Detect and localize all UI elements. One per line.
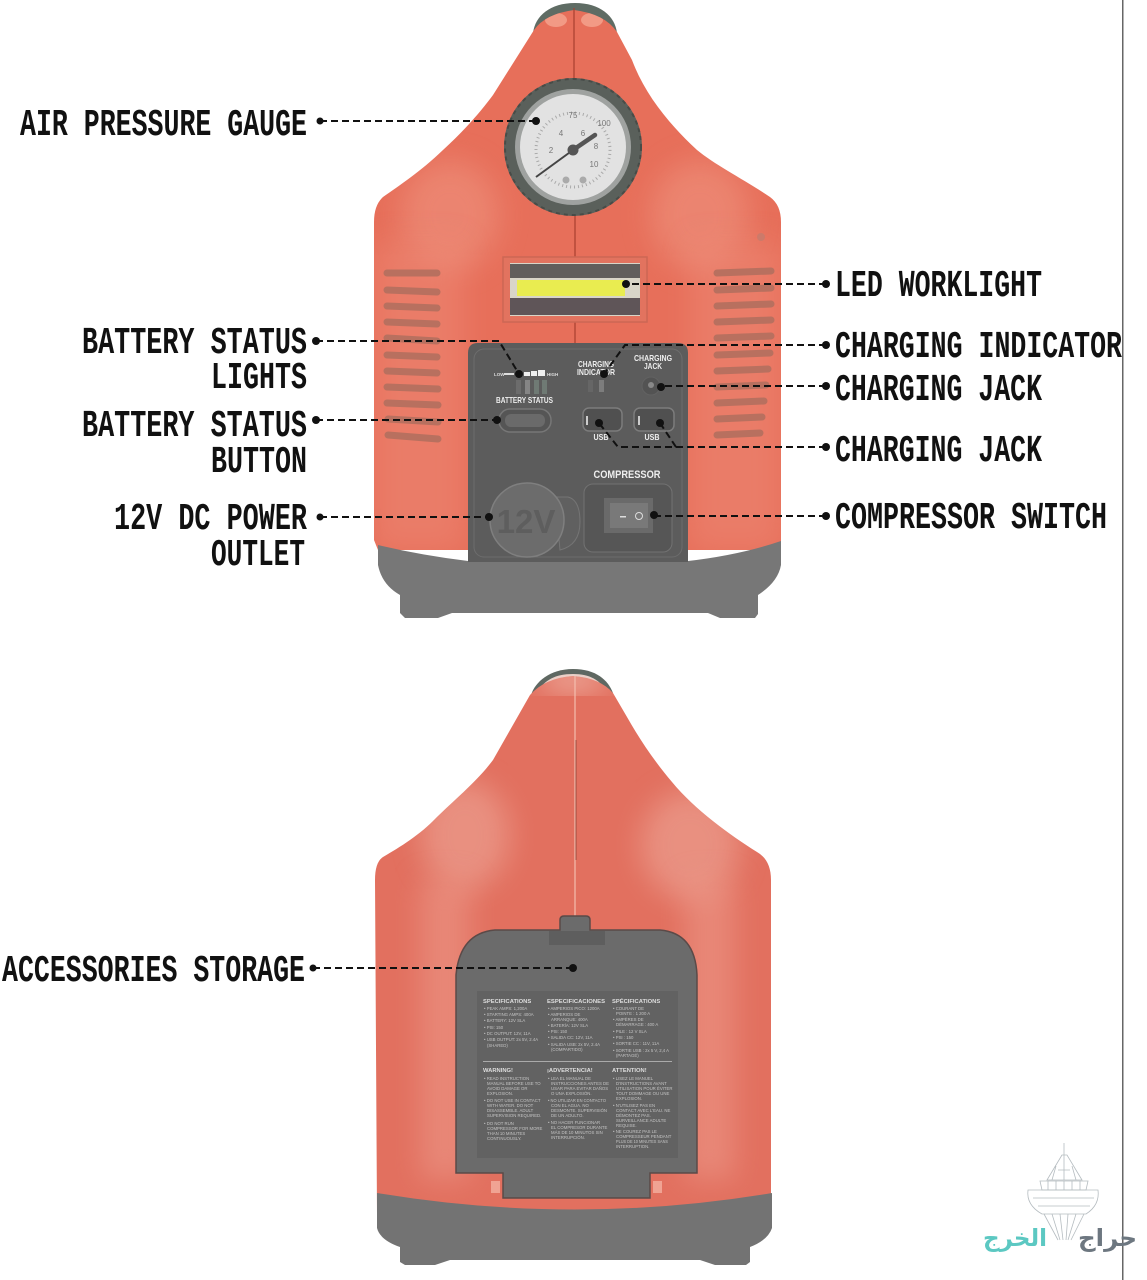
callout: air pressure gauge: AIR PRESSURE GAUGE [20,104,307,147]
USB ports: USB [594,433,609,442]
spécifications column: • PSI : 150 [613,1035,634,1040]
specifications column: CONTINUOUSLY. [487,1136,521,1141]
spécifications column: • COURANT DE [613,1006,644,1011]
especificaciones column: • NO UTILIZAR EN CONTACTO [548,1098,607,1103]
charging indicator: CHARGING [578,359,614,369]
specifications column: • USB OUTPUT: 2x 5V, 2.4A [484,1037,538,1042]
especificaciones column: CON EL AGUA. NO [551,1103,589,1108]
battery status lights: LOW [494,372,505,377]
spécifications column: TOUT DOMMAGE OU UNE [616,1091,669,1096]
red body [370,0,790,580]
spécifications column: • N'UTILISEZ PAS EN [613,1103,655,1108]
air pressure gauge: 75 [569,111,578,120]
compressor switch [584,469,672,552]
watermark logo [983,1143,1137,1252]
spécifications column: EXPLOSION. [616,1096,642,1101]
centre seam [574,8,575,344]
specifications column: AVOID DAMAGE OR [487,1086,528,1091]
callout: USB charging jacks [595,419,1042,473]
callout: USB charging jacks: CHARGING JACK [835,430,1042,473]
especificaciones column: • SALIDA CC: 12V, 11A [548,1035,593,1040]
callout: 12V DC power outlet: 12V DC POWER [114,498,307,541]
specifications column: DISASSEMBLE. ADULT [487,1108,534,1113]
gray base [378,541,781,618]
especificaciones column: EL COMPRESOR DURANTE [551,1125,608,1130]
especificaciones column: ESPECIFICACIONES [547,999,605,1005]
control panel [468,343,688,562]
especificaciones column: • NO HACER FUNCIONAR [548,1120,600,1125]
especificaciones column: ¡ADVERTENCIA! [547,1068,593,1074]
right vents [717,271,771,435]
especificaciones column: ARRANQUE: 400A [551,1017,588,1022]
especificaciones column: O UNA EXPLOSIÓN. [551,1091,592,1096]
page edge line [1122,0,1124,1280]
callout: compressor switch [650,497,1107,540]
especificaciones column: INTERRUPCIÓN. [551,1135,585,1140]
specifications column: • STARTING AMPS: 400A [484,1012,534,1017]
specifications column: EXPLOSION. [487,1091,513,1096]
spécifications column: (PARTAGÉ) [616,1053,639,1058]
callout: charging jack: CHARGING JACK [835,369,1042,412]
charging indicator [577,359,615,392]
callout: LED worklight: LED WORKLIGHT [835,265,1042,308]
specifications column: • DC OUTPUT: 12V, 11A [484,1031,531,1036]
spécifications column: SPÉCIFICATIONS [612,997,660,1005]
spécifications column: • LISEZ LE MANUEL [613,1076,654,1081]
especificaciones column: MÁS DE 10 MINUTOS SIN [551,1130,603,1135]
spécifications column: • NE COUREZ PAS LE [613,1129,657,1134]
specifications column: WARNING! [483,1068,513,1074]
especificaciones column: DE UN ADULTO. [551,1113,584,1118]
especificaciones column: • AMPERIOS DE [548,1012,580,1017]
spécifications column: • SORTIE USB : 2x 5 V, 2,4 A [613,1048,669,1053]
compressor switch: COMPRESSOR [594,469,661,481]
callout: battery status button [82,405,501,484]
especificaciones column [547,999,609,1140]
centre seam [574,676,576,916]
air pressure gauge: 100 [597,119,611,128]
air pressure gauge: 6 [581,129,586,138]
specifications column: • PSI: 150 [484,1025,504,1030]
specifications column: • DO NOT RUN [484,1121,514,1126]
air pressure gauge: 2 [549,146,554,155]
specifications column: (SHARED) [487,1043,508,1048]
charging jack: CHARGING [634,353,672,363]
spécifications column: • PILE : 12 V SLA [613,1029,647,1034]
callout: battery status button: BATTERY STATUS [82,405,307,448]
especificaciones column: DESMONTE. SUPERVISIÓN [551,1108,607,1113]
watermark text: Haraj: حراج [1078,1224,1137,1252]
specifications column: THAN 10 MINUTES [487,1131,525,1136]
spécifications column: POINTE : 1 200 A [616,1011,650,1016]
specifications column: COMPRESSOR FOR MORE [487,1126,543,1131]
specifications column: SPECIFICATIONS [483,999,531,1005]
especificaciones column: • PSI: 150 [548,1029,568,1034]
spécifications column: INTERRUPTION. [616,1144,649,1149]
device: rear view [370,669,780,1265]
USB ports: USB [644,433,660,442]
door hinge tabs [491,1181,662,1193]
12V power outlet cap: 12V [497,503,555,540]
battery status button [496,395,553,432]
device: front view [370,0,790,618]
callout: 12V DC power outlet: OUTLET [211,534,305,577]
specifications column: • DO NOT USE IN CONTACT [484,1098,541,1103]
spécifications column: COMPRESSEUR PENDANT [616,1134,672,1139]
spécifications column: • AMPÈRES DE [613,1017,644,1022]
accessories storage door [456,916,697,1198]
specifications column: • PEAK AMPS: 1,200A [484,1006,527,1011]
charging indicator: INDICATOR [577,367,615,377]
callout: battery status button: BUTTON [211,441,307,484]
spécifications column: REQUISE. [616,1123,637,1128]
battery status lights: HIGH [547,372,558,377]
especificaciones column: (COMPARTIDO) [551,1047,583,1052]
spécifications column: PLUS DE 10 MINUTES SANS [616,1139,668,1144]
specifications column: • BATTERY: 12V SLA [484,1018,525,1023]
especificaciones column: • SALIDA USB: 2x 5V, 2.4A [548,1042,600,1047]
especificaciones column: INSTRUCCIONES ANTES DE [551,1081,609,1086]
air pressure gauge [504,78,642,216]
top handle [533,3,617,33]
specifications column: WITH WATER. DO NOT [487,1103,534,1108]
air pressure gauge: 4 [559,129,564,138]
spécifications column: • SORTIE CC : 11V, 11A [613,1041,659,1046]
callout: charging indicator [600,326,1122,378]
12V power outlet cap [490,483,580,557]
callout: accessories storage: ACCESSORIES STORAGE [2,950,305,993]
specifications column: MANUAL BEFORE USE TO [487,1081,541,1086]
top handle [531,669,613,695]
side screw [757,233,765,241]
spécifications column: DÉMARRAGE : 400 A [616,1022,658,1027]
callout: charging jack [657,369,1042,412]
spécifications column: CONTACT AVEC L'EAU. NE [616,1108,670,1113]
watermark text: Al-Kharj: الخرج [983,1224,1047,1252]
spécifications column: DÉMONTEZ PAS. [616,1113,651,1118]
specification label [477,991,678,1158]
especificaciones column: • LEA EL MANUAL DE [548,1076,591,1081]
red body [370,670,780,1240]
gray base [377,1193,772,1265]
especificaciones column: • AMPERIOS PICO: 1200A [548,1006,600,1011]
especificaciones column: • BATERÍA: 12V SLA [548,1023,588,1028]
spécifications column: SURVEILLANCE ADULTE [616,1118,666,1123]
left vents [387,273,438,439]
callout: battery status lights [82,322,523,400]
specifications column: • READ INSTRUCTION [484,1076,529,1081]
spécifications column: UTILISATION POUR ÉVITER [616,1086,673,1091]
specifications column: SUPERVISION REQUIRED. [487,1113,541,1118]
battery status lights [494,370,558,394]
air pressure gauge: 10 [590,160,599,169]
LED worklight [503,257,647,322]
callout: LED worklight [622,265,1042,308]
spécifications column: D'INSTRUCTIONS AVANT [616,1081,667,1086]
spécifications column: ATTENTION! [612,1068,647,1074]
callout: battery status lights: LIGHTS [211,357,307,400]
air pressure gauge: 8 [594,142,599,151]
callout: 12V DC power outlet [114,498,493,577]
especificaciones column: USAR PARA EVITAR DAÑOS [551,1086,608,1091]
charging jack [634,353,672,395]
icon: tower [1028,1143,1098,1240]
specifications column [483,999,543,1141]
USB ports [583,408,674,442]
handle inner highlight [537,674,607,692]
battery status button: BATTERY STATUS [496,395,553,405]
callout: battery status lights: BATTERY STATUS [82,322,307,365]
charging jack: JACK [644,361,663,371]
spécifications column [612,997,673,1149]
